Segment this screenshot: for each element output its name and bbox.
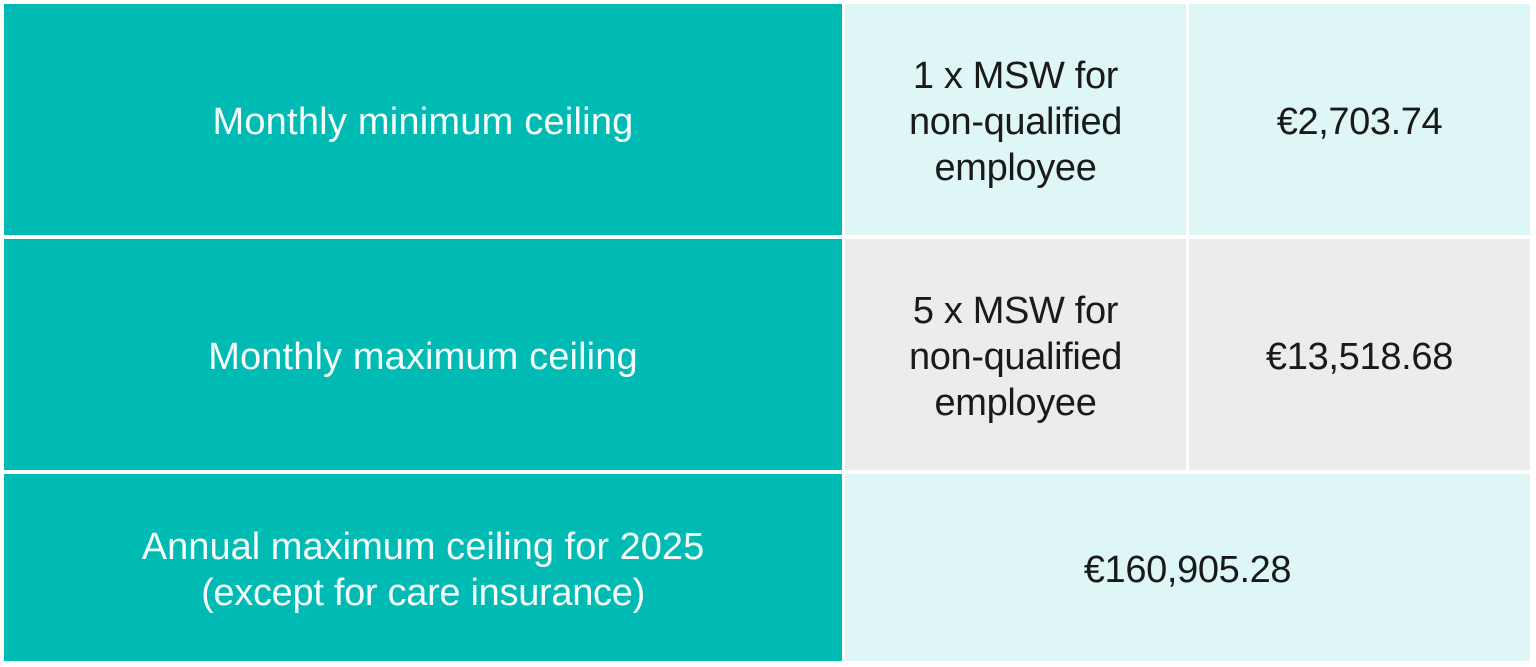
row 2 value: €13,518.68: [1266, 336, 1453, 378]
row 1 value: €2,703.74: [1277, 100, 1442, 142]
row 2 formula: 5 x MSW: 5 x MSW for: [913, 290, 1118, 332]
row 3 label: annual maximum ceiling: Annual maximum ceiling for 2025: [142, 526, 704, 568]
row 3 label: annual maximum ceiling: (except for care insurance): [201, 572, 645, 614]
row 2 value: [1189, 239, 1530, 470]
row 2 label: monthly maximum ceiling: Monthly maximum ceiling: [208, 336, 638, 378]
row 2 formula: 5 x MSW: [845, 239, 1186, 470]
row 1 formula: 1 x MSW: 1 x MSW for: [913, 54, 1118, 96]
row 2 label: monthly maximum ceiling: [4, 239, 842, 470]
row 1 label: monthly minimum ceiling: Monthly minimum ceiling: [212, 100, 634, 142]
row 1 formula: 1 x MSW: employee: [935, 146, 1096, 188]
row 2 formula: 5 x MSW: employee: [935, 382, 1096, 424]
row 1 formula: 1 x MSW: [845, 4, 1186, 235]
row 1 formula: 1 x MSW: non-qualified: [909, 100, 1122, 142]
row 3 label: annual maximum ceiling: [4, 474, 842, 661]
row 3 value: [845, 474, 1530, 661]
row 3 value: €160,905.28: [1084, 548, 1291, 590]
row 2 formula: 5 x MSW: non-qualified: [909, 336, 1122, 378]
row 1 label: monthly minimum ceiling: [4, 4, 842, 235]
row 1 value: [1189, 4, 1530, 235]
